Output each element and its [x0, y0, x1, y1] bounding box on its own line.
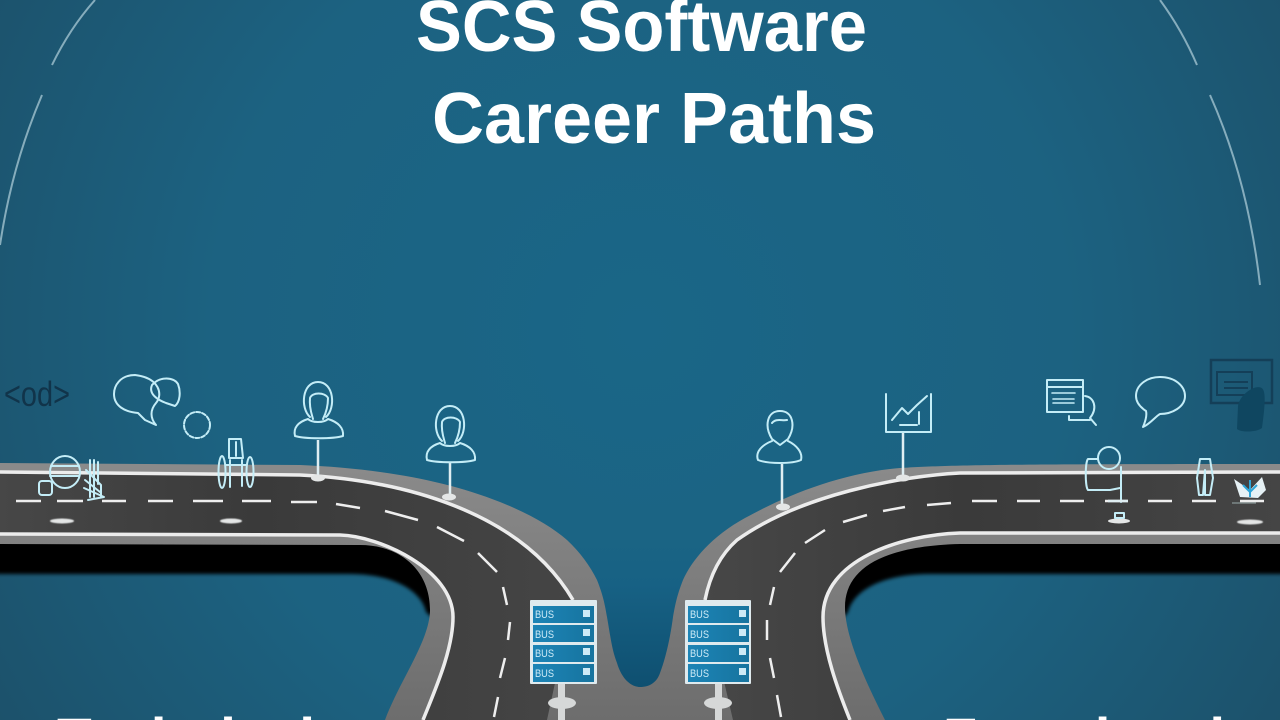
right signpost: BUS [690, 648, 709, 660]
centre notch shading [567, 540, 710, 690]
title [416, 0, 876, 159]
post [715, 683, 722, 720]
right signpost: BUS [690, 629, 709, 641]
milestone: growth chart [886, 394, 931, 482]
post [558, 683, 565, 720]
right signpost: BUS [690, 609, 709, 621]
shadows beneath the roads [0, 530, 1280, 625]
left signpost: BUS [535, 629, 554, 641]
milestone: person one [295, 382, 343, 482]
right signpost [685, 600, 751, 720]
right road surface [705, 472, 1280, 720]
milestone: person two [427, 406, 475, 500]
right centre dashes [767, 501, 1264, 717]
right signpost: BUS [690, 668, 709, 680]
icon: scroll on post [1086, 447, 1130, 524]
icon: figure on road [1197, 459, 1213, 495]
icon: code tag: <od> [4, 375, 70, 414]
left signpost: BUS [535, 609, 554, 621]
icon: dark window with hand [1211, 360, 1272, 432]
icon: gear [184, 412, 210, 438]
left signpost: BUS [535, 668, 554, 680]
sign board [685, 600, 751, 684]
icon: wheeled figure on road [218, 439, 254, 488]
road shoulder [0, 463, 1280, 720]
sign board [530, 600, 597, 684]
road edge lines [0, 472, 1280, 720]
left signpost: BUS [535, 648, 554, 660]
left centre dashes [16, 501, 510, 717]
left road surface [0, 472, 573, 720]
icon: butterfly on road [1232, 477, 1266, 503]
icon: speech bubbles [114, 375, 180, 425]
icon: browser window with hand [1047, 380, 1096, 425]
icon: magnifier and ship on road [39, 456, 104, 500]
decorative arcs [0, 0, 1260, 285]
road network [0, 463, 1280, 720]
milestone: person three [757, 411, 801, 510]
left signpost [530, 600, 597, 720]
road markers [50, 518, 1263, 524]
icon: speech bubble [1136, 377, 1185, 427]
title: Career Paths [432, 79, 876, 159]
